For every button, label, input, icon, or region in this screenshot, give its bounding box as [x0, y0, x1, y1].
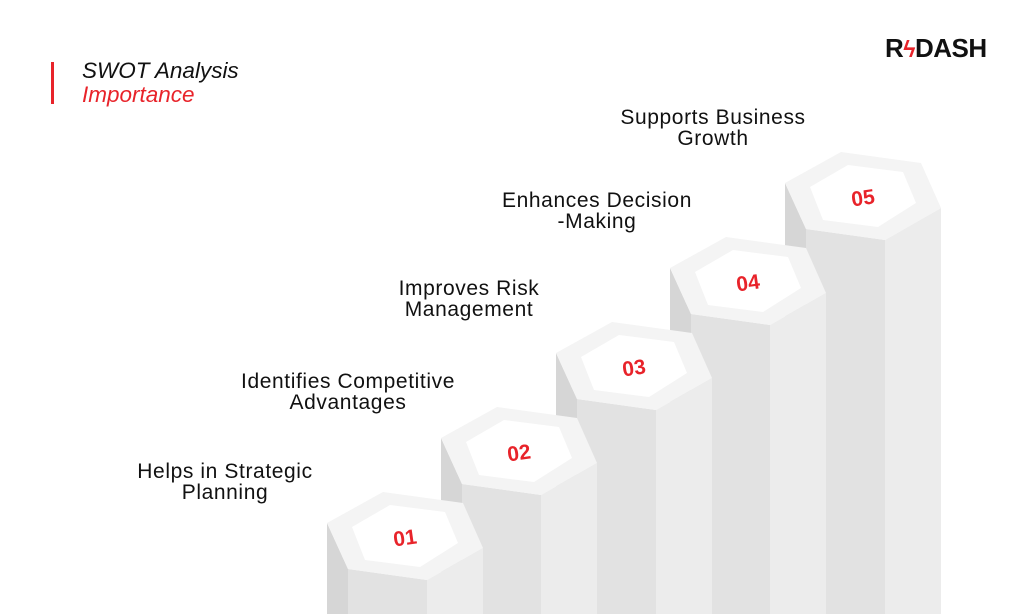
logo: RϟDASH: [885, 33, 987, 63]
step 03: 03: [621, 355, 647, 382]
title bar accent: [51, 62, 54, 104]
label 2: Identifies Competitive: [241, 370, 455, 393]
label 4: [502, 189, 692, 233]
step 03: [556, 322, 712, 614]
label 4: -Making: [558, 210, 636, 233]
step 05: [785, 152, 941, 614]
label 5: Supports Business: [620, 106, 806, 129]
step 01: [327, 492, 483, 614]
label 1: Planning: [182, 481, 268, 504]
step 05: 05: [850, 185, 877, 212]
step 01: 01: [392, 525, 419, 552]
step 04: [670, 237, 826, 614]
step 02: [441, 407, 597, 614]
label 3: Management: [405, 298, 533, 321]
label 2: Advantages: [290, 391, 406, 414]
title: [82, 58, 239, 107]
label 1: Helps in Strategic: [137, 460, 313, 483]
label 3: [399, 277, 539, 321]
label 2: [241, 370, 455, 414]
label 5: Growth: [677, 127, 749, 150]
title: SWOT Analysis: [82, 58, 239, 83]
label 3: Improves Risk: [399, 277, 539, 300]
label 5: [620, 106, 806, 150]
label 1: [137, 460, 313, 504]
title: Importance: [82, 82, 195, 107]
step 04: 04: [735, 270, 762, 297]
label 4: Enhances Decision: [502, 189, 692, 212]
step 02: 02: [506, 440, 532, 467]
